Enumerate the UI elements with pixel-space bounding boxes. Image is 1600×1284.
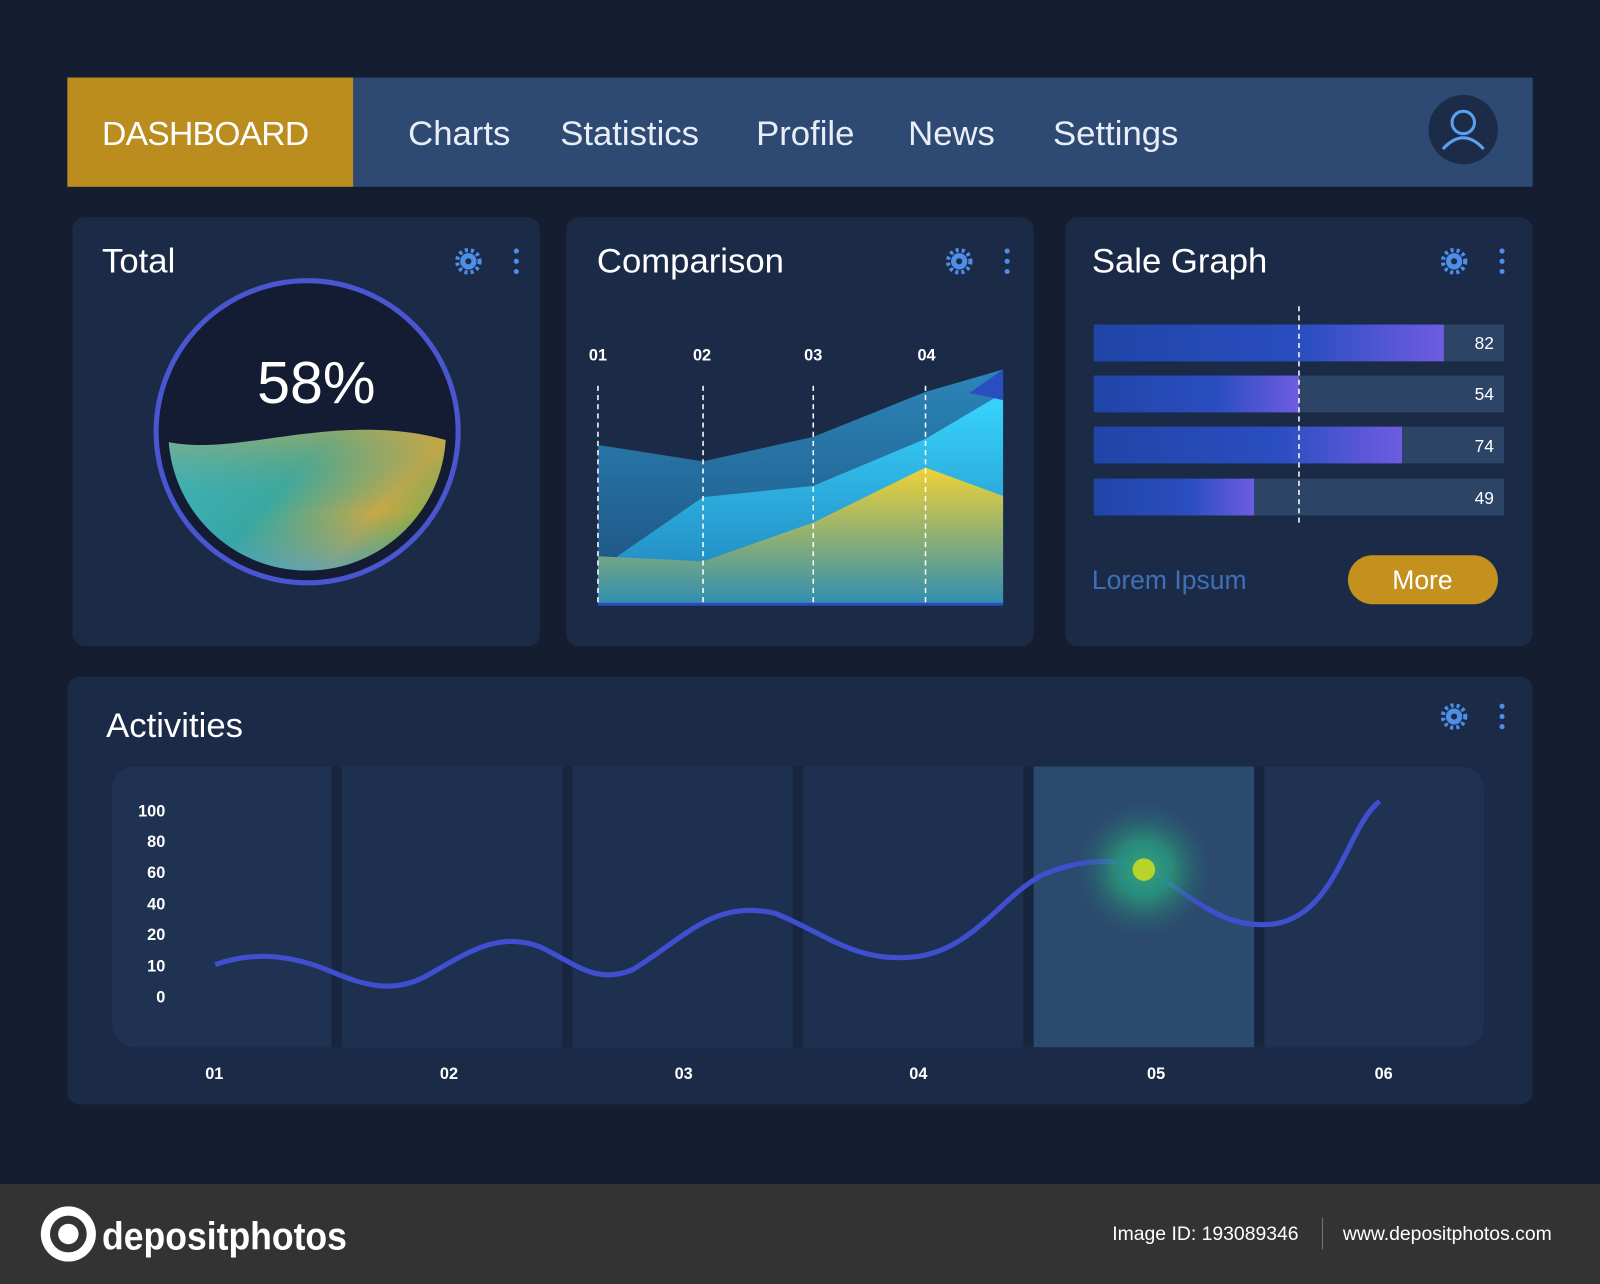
line chart: 20 [147,926,165,944]
panel: sale graph [1065,217,1533,646]
bar chart: 49 [1475,488,1494,508]
panel: activities: Activities [106,707,243,745]
bar chart: 74 [1475,436,1494,456]
nav links: News [908,115,995,153]
navigation bar [67,78,1533,187]
button: more: More [1392,565,1453,595]
bar chart [1094,306,1504,526]
nav links: Statistics [560,115,699,153]
panel: comparison: Comparison [597,243,784,281]
panel: sale graph: Lorem Ipsum [1092,565,1247,595]
button: more [1348,555,1498,604]
line chart: 10 [147,958,165,976]
nav links [408,115,1178,153]
footer: www.depositphotos.com [1342,1223,1552,1245]
area chart: 02 [693,346,711,364]
line chart: 60 [147,864,165,882]
line chart: 0 [156,988,165,1006]
dashboard tab [67,78,353,187]
gauge: 58%: 58% [257,349,376,416]
line chart: 40 [147,895,165,913]
line chart: 80 [147,833,165,851]
area chart: 01 [589,346,607,364]
panel: total: Total [102,243,175,281]
line chart: 01 [205,1065,223,1083]
gauge: 58% [156,281,458,612]
panel: comparison [566,217,1034,646]
nav links: Settings [1053,115,1178,153]
nav links: Charts [408,115,510,153]
icon: gear & menu [457,249,519,274]
panel: total [72,217,540,646]
panel: activities [67,677,1533,1104]
area chart: 03 [804,346,822,364]
footer: Image ID: 193089346 [1112,1223,1299,1245]
line chart: 100 [138,803,165,821]
area chart: 04 [917,346,936,364]
logo: depositphotos [102,1215,347,1258]
line chart [112,767,1484,1083]
footer [0,1184,1600,1284]
logo [41,1206,347,1262]
line chart: 02 [440,1065,458,1083]
bar chart: 82 [1475,333,1494,353]
line chart: 03 [675,1065,693,1083]
nav links: Profile [756,115,854,153]
dashboard tab: DASHBOARD [102,116,309,153]
panel: sale graph: Sale Graph [1092,243,1267,281]
line chart: 04 [909,1065,927,1083]
line chart: 05 [1147,1065,1165,1083]
line chart: 06 [1375,1065,1393,1083]
area chart [589,346,1003,604]
icon: user [1429,95,1498,164]
bar chart: 54 [1475,384,1494,404]
